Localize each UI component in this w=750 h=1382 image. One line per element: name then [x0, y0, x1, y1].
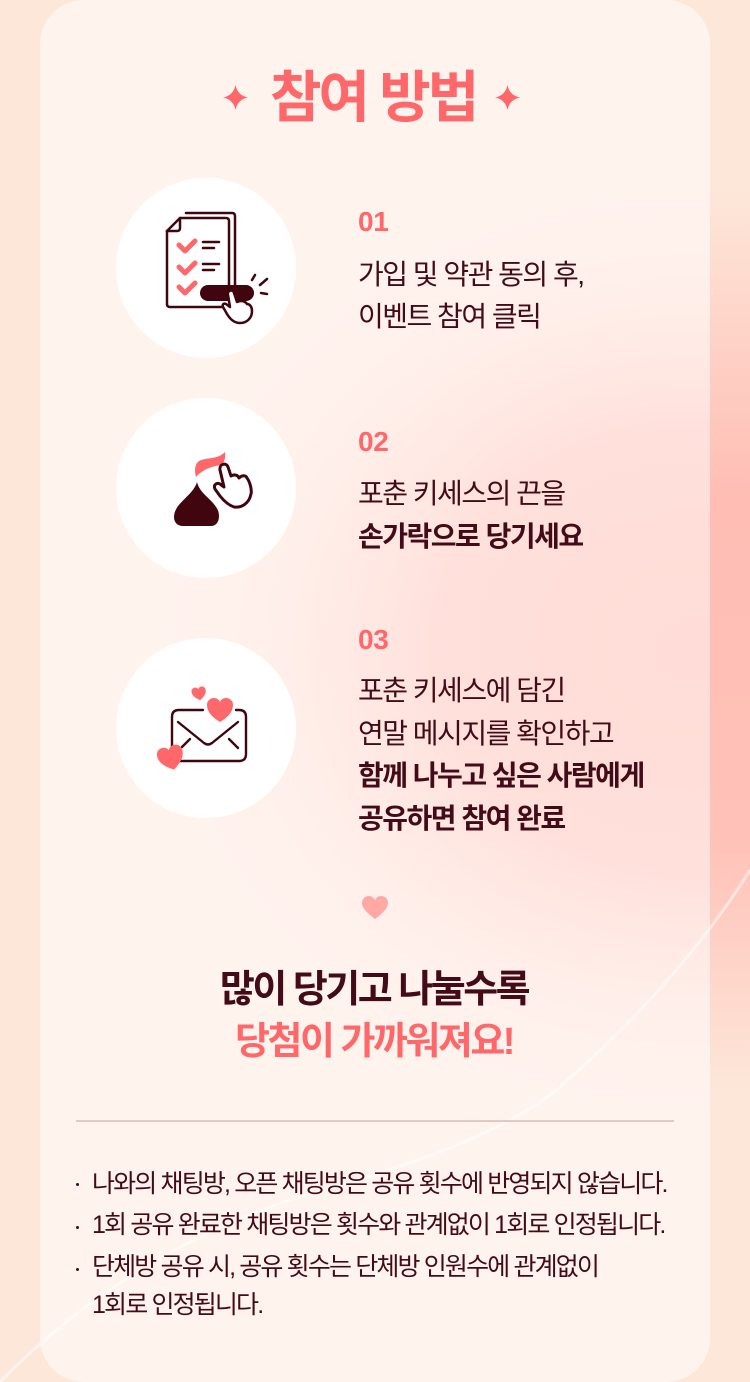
bullet 3: [76, 1268, 79, 1271]
divider: [76, 1120, 674, 1122]
step 3 number: 03: [358, 624, 389, 655]
title: [223, 66, 520, 129]
closing message: [220, 969, 530, 1063]
step 3 text: 연말 메시지를 확인하고: [358, 718, 613, 749]
note 2: 1회 공유 완료한 채팅방은 횟수와 관계없이 1회로 인정됩니다.: [92, 1211, 664, 1239]
bullet 1: [76, 1183, 79, 1186]
note 3: 1회로 인정됩니다.: [92, 1291, 262, 1319]
closing message: 당첨이 가까워져요!: [235, 1021, 513, 1063]
step 2 text: [358, 478, 583, 552]
bullet 2: [76, 1226, 79, 1229]
step 2 text: 손가락으로 당기세요: [358, 521, 583, 552]
icon: left sparkle: [223, 85, 248, 110]
step 3 text: 함께 나누고 싶은 사람에게: [358, 760, 644, 791]
icon: kiss and hand in circle: [116, 398, 296, 578]
icon: small heart: [362, 896, 388, 919]
icon: checklist in circle: [116, 178, 296, 358]
step 2 number: 02: [358, 426, 389, 457]
note 3: 단체방 공유 시, 공유 횟수는 단체방 인원수에 관계없이: [92, 1253, 598, 1281]
step 1 number: 01: [358, 206, 389, 237]
icon: right sparkle: [495, 85, 520, 110]
step 1 text: 가입 및 약관 동의 후,: [358, 259, 583, 290]
closing message: 많이 당기고 나눌수록: [220, 969, 528, 1011]
note 3: [92, 1253, 598, 1319]
heading text: 참여 방법: [270, 66, 476, 129]
step 3 text: 공유하면 참여 완료: [358, 803, 565, 834]
notes: [76, 1170, 667, 1319]
step 3 text: 포춘 키세스에 담긴: [358, 675, 565, 706]
step 3 text: [358, 675, 644, 834]
step 1 text: 이벤트 참여 클릭: [358, 301, 540, 332]
icon: envelope and hearts in circle: [116, 638, 296, 818]
step 1 text: [358, 259, 583, 332]
step 2 text: 포춘 키세스의 끈을: [358, 478, 565, 509]
note 1: 나와의 채팅방, 오픈 채팅방은 공유 횟수에 반영되지 않습니다.: [92, 1170, 667, 1198]
